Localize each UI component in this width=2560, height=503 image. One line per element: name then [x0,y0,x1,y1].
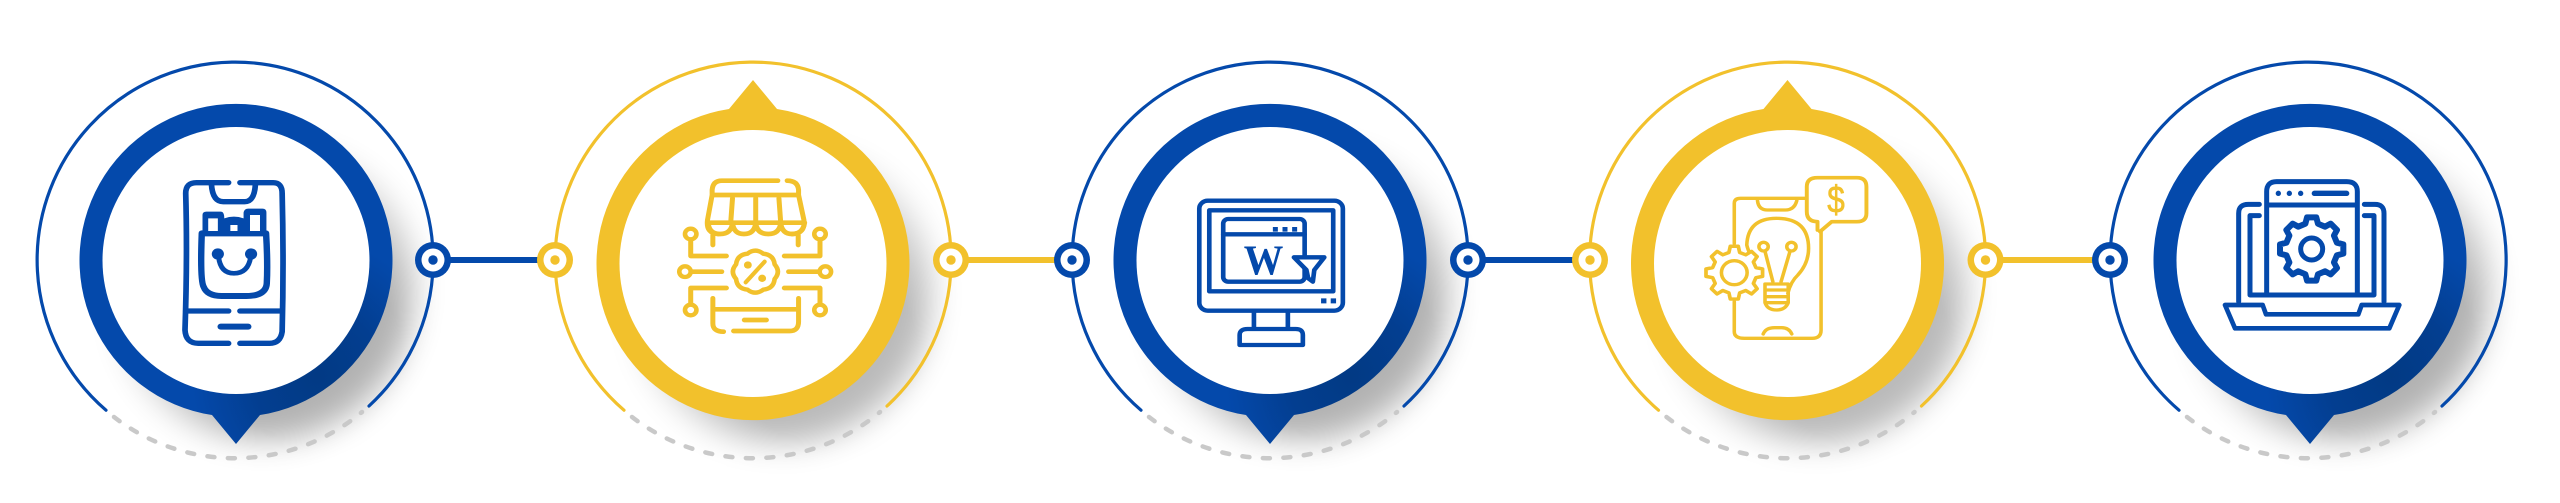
outer ring [2110,62,2506,410]
drop shadow [2181,131,2491,441]
connector 1 [433,257,555,263]
node 1 right [415,242,451,278]
connector 3 [1468,257,1590,263]
node 2 left [537,242,573,278]
connector nodes [415,242,2128,278]
dashed arc [114,412,362,458]
drop shadow [623,134,933,444]
panel: step 2 digital store [555,62,951,458]
outer ring [1590,62,1986,410]
thick ring with pointer [1631,80,1944,420]
infographic: five connected circles [36,60,2508,460]
dashed arc [1149,412,1397,458]
icon: monitor with browser window: W [1244,237,1284,284]
drop shadow [1658,134,1968,444]
thick ring with pointer [2154,104,2467,444]
inner disc [2176,127,2444,394]
dashed arc [632,412,880,458]
icon: store with discount badge and circuits [679,181,831,332]
inner disc [102,127,370,394]
panel: step 3 monitor [1072,62,1468,458]
thick ring with pointer [80,104,392,444]
thick ring with pointer [1113,104,1427,444]
node 2 right [933,242,969,278]
outer ring [37,62,433,410]
inner disc [1136,127,1404,394]
icon: laptop with settings window [2225,182,2399,328]
node 3 right [1450,242,1486,278]
drop shadow [1141,131,1451,441]
connectors between steps [433,257,2110,263]
panel: step 5 laptop settings [2110,62,2506,458]
dashed arc [1666,412,1914,458]
node 4 right [1968,242,2004,278]
icon: phone with shopping bag [185,183,283,343]
icon: monitor with browser window [1199,201,1343,345]
panel: step 1 phone shopping [37,62,433,458]
inner disc [620,130,886,397]
node 4 left [1572,242,1608,278]
drop shadow [106,131,416,441]
outer ring [555,62,951,410]
icon: phone with bulb gear and money bubble: $ [1827,180,1845,221]
inner disc [1654,130,1921,397]
thick ring with pointer [596,80,910,420]
connector 4 [1986,257,2110,263]
outer ring [1072,62,1468,410]
node 3 left [1054,242,1090,278]
icon: phone with bulb gear and money bubble [1706,178,1866,338]
node 5 left [2092,242,2128,278]
connector 2 [951,257,1072,263]
dashed arc [2187,412,2435,458]
panel: step 4 phone idea [1590,62,1986,458]
